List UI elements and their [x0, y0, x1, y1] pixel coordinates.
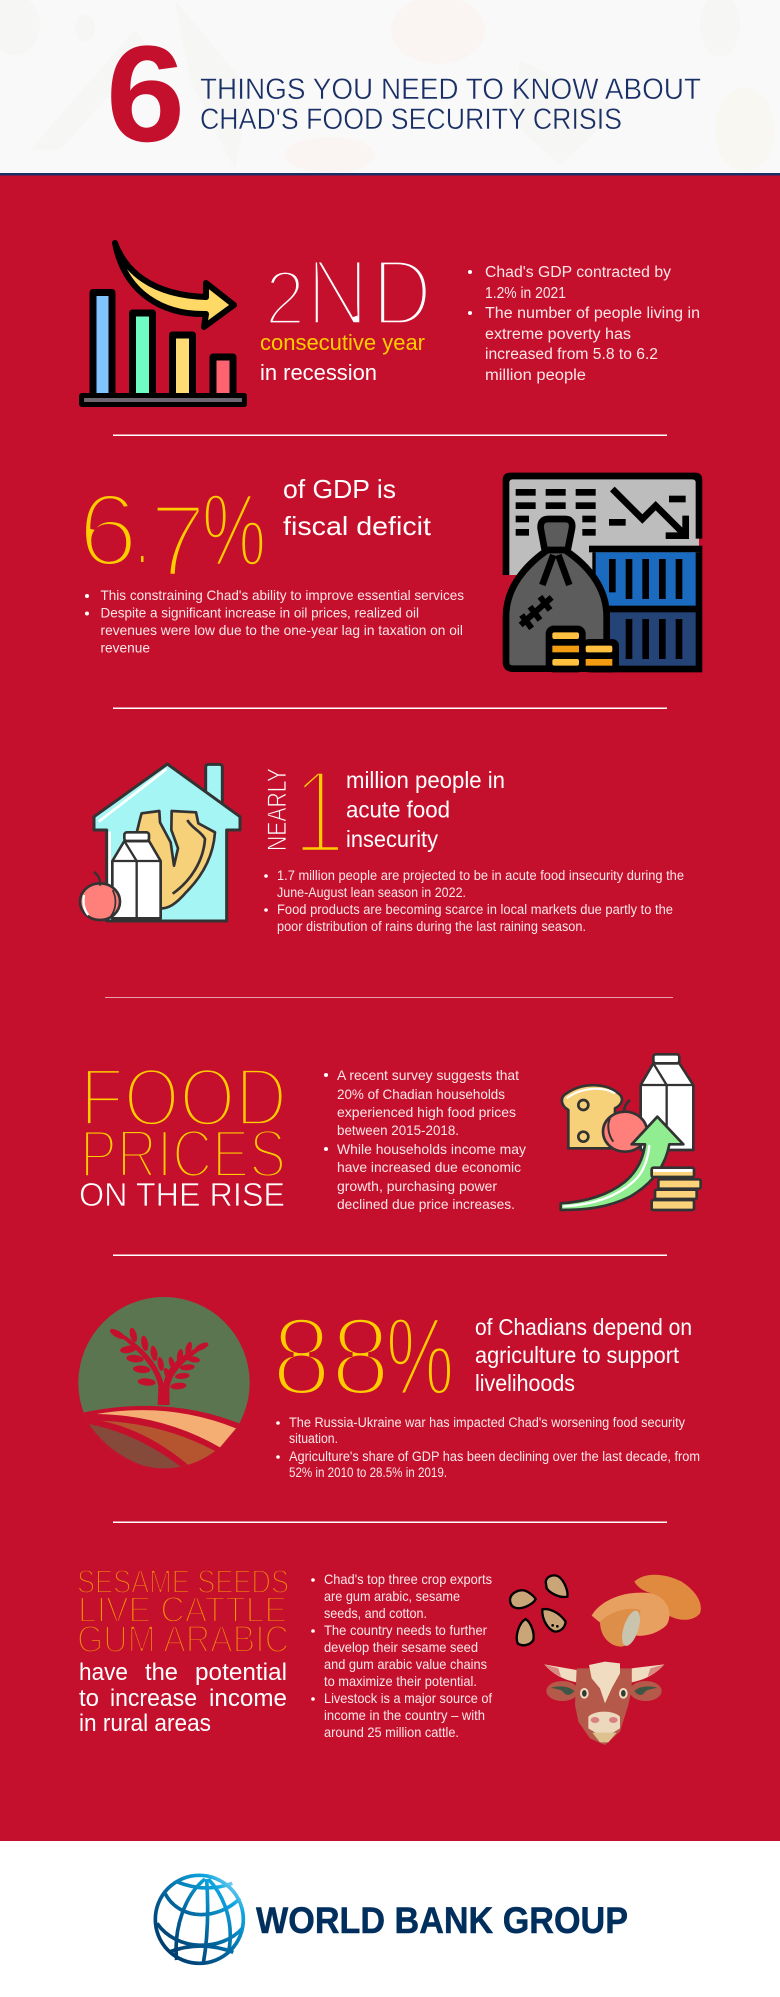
bullet list: A recent survey suggests that — [337, 1067, 519, 1083]
bullet list: income in the country – with — [324, 1707, 485, 1723]
bullet list: are gum arabic, sesame — [324, 1588, 460, 1604]
bullet list: growth, purchasing power — [337, 1178, 497, 1194]
label: NEARLY: NEARLY — [262, 768, 292, 851]
text: have the potential to increase income in rural areas: potential — [195, 1659, 287, 1686]
bullet list: experienced high food prices — [337, 1104, 516, 1120]
bullet list — [324, 1067, 526, 1212]
heading: sesame seeds, live cattle, gum arabic — [77, 1563, 289, 1661]
bullet list: Agriculture's share of GDP has been declining over the last decade, from — [289, 1449, 700, 1464]
stat: 2ND: D — [372, 240, 432, 346]
icon: seeds, almonds and cow — [510, 1575, 701, 1745]
bullet list: 20% of Chadian households — [337, 1086, 505, 1102]
heading: of Chadians depend on agriculture: livelihoods — [475, 1370, 575, 1396]
heading: of Chadians depend on agriculture: of Chadians depend on — [475, 1314, 692, 1340]
bullet list: June-August lean season in 2022. — [277, 885, 466, 900]
bullet list: between 2015-2018. — [337, 1122, 459, 1138]
heading: consecutive year in recession: consecutive year — [260, 330, 425, 355]
text: have the potential to increase income in rural areas: to — [79, 1685, 99, 1712]
seeds — [510, 1575, 568, 1645]
bullet list: develop their sesame seed — [324, 1639, 478, 1655]
bullet list: situation. — [289, 1431, 338, 1446]
bullet list: Chad's GDP contracted by — [485, 264, 671, 281]
stat: 6.7% — [78, 472, 266, 598]
text: have the potential to increase income in rural areas: have — [79, 1659, 128, 1686]
text: have the potential to increase income in rural areas: income — [209, 1685, 287, 1712]
text: have the potential to increase income in rural areas: the — [145, 1659, 178, 1686]
icon: farmland circle with wheat — [77, 1297, 250, 1477]
stat: 1: 1 — [293, 745, 345, 879]
heading: sesame seeds, live cattle, gum arabic: LIVE CATTLE — [78, 1589, 287, 1630]
heading: million people in acute food insecurity: insecurity — [346, 826, 438, 852]
section 6: exports and rural income — [77, 1563, 701, 1745]
heading: food prices on the rise: ON THE RISE — [79, 1176, 285, 1213]
heading: million people in acute food insecurity — [346, 767, 505, 852]
bullet list — [468, 264, 700, 384]
title: CHAD'S FOOD SECURITY CRISIS — [200, 103, 622, 136]
bullet list: around 25 million cattle. — [324, 1724, 459, 1740]
bullet list: extreme poverty has — [485, 326, 631, 343]
section 4: food prices — [79, 1051, 701, 1213]
heading: food prices on the rise: PRICES — [80, 1116, 286, 1192]
section 2: fiscal deficit — [78, 472, 702, 672]
bullet list: declined due price increases. — [337, 1196, 515, 1212]
heading: consecutive year in recession — [260, 330, 425, 385]
bullet list: The Russia-Ukraine war has impacted Chad's worsening food security — [289, 1415, 685, 1430]
heading: sesame seeds, live cattle, gum arabic: SESAME SEEDS — [77, 1563, 289, 1600]
text: have the potential to increase income in rural areas: increase — [110, 1685, 197, 1712]
bullet list: Livestock is a major source of — [324, 1690, 492, 1706]
bullet list: Despite a significant increase in oil prices, realized oil — [100, 604, 419, 620]
bullet list: increased from 5.8 to 6.2 — [485, 346, 658, 363]
section 5: agriculture — [77, 1296, 700, 1480]
heading: of GDP is fiscal deficit: fiscal deficit — [283, 511, 432, 541]
icon: globe — [155, 1875, 243, 1963]
bullet list: 1.7 million people are projected to be in acute food insecurity during the — [277, 868, 684, 883]
almonds — [592, 1575, 701, 1648]
icon: rising food prices — [561, 1054, 701, 1210]
bullet list: million people — [485, 367, 586, 384]
heading: consecutive year in recession: in recession — [260, 360, 377, 385]
bullet list: 1.2% in 2021 — [485, 285, 566, 302]
bullet list — [264, 868, 684, 934]
heading: of Chadians depend on agriculture: agriculture to support — [475, 1342, 680, 1368]
bullet list: and gum arabic value chains — [324, 1656, 487, 1672]
title — [200, 73, 701, 136]
stat: 2ND — [265, 240, 432, 346]
big number 6: 6 — [106, 18, 185, 171]
header band — [0, 0, 780, 176]
heading: of Chadians depend on agriculture — [475, 1314, 692, 1396]
heading: of GDP is fiscal deficit — [283, 474, 432, 541]
stat: 88%: % — [386, 1296, 454, 1418]
section 1: recession — [79, 240, 700, 407]
bullet list: seeds, and cotton. — [324, 1605, 427, 1621]
heading: million people in acute food insecurity: million people in — [346, 767, 505, 793]
heading: sesame seeds, live cattle, gum arabic: GUM ARABIC — [77, 1619, 289, 1661]
bullet list — [85, 587, 464, 656]
bullet list: revenues were low due to the one-year lag in taxation on oil — [100, 622, 463, 638]
stat: 88%: 88 — [272, 1296, 390, 1418]
stat: 6.7%: % — [202, 472, 266, 588]
cow — [544, 1662, 664, 1745]
stat: 6.7%: 6 — [78, 472, 138, 588]
wordmark: WORLD BANK GROUP — [256, 1899, 628, 1941]
bullet list: While households income may — [337, 1141, 526, 1157]
bullet list: 52% in 2010 to 28.5% in 2019. — [289, 1465, 447, 1480]
stat: 2ND: N — [306, 240, 369, 346]
heading: of GDP is fiscal deficit: of GDP is — [283, 474, 396, 504]
stat: 6.7%: 7 — [150, 484, 206, 598]
heading: food prices on the rise: FOOD — [80, 1051, 287, 1144]
icon: money bag, chart and containers — [503, 473, 702, 672]
bullet list: The country needs to further — [324, 1622, 487, 1638]
stat: 88% — [272, 1296, 454, 1418]
text: have the potential to increase income in rural areas — [79, 1659, 287, 1737]
heading: food prices on the rise — [79, 1051, 287, 1213]
title: THINGS YOU NEED TO KNOW ABOUT — [200, 73, 701, 106]
footer: World Bank Group logo — [0, 1841, 780, 1997]
bullet list: to maximize their potential. — [324, 1673, 477, 1689]
heading: million people in acute food insecurity: acute food — [346, 796, 450, 822]
bullet list: The number of people living in — [485, 305, 700, 322]
bullet list: have increased due economic — [337, 1159, 521, 1175]
stat: 2ND: 2 — [265, 256, 305, 342]
bullet list: This constraining Chad's ability to improve essential services — [100, 587, 464, 603]
bullet list — [276, 1415, 700, 1480]
bullet list: Chad's top three crop exports — [324, 1571, 492, 1587]
bullet list: revenue — [100, 640, 150, 656]
icon: falling bar chart — [79, 243, 247, 407]
bullet list: Food products are becoming scarce in local markets due partly to the — [277, 902, 673, 917]
section 3: acute food insecurity — [80, 745, 684, 934]
bullet list: poor distribution of rains during the last raining season. — [277, 919, 586, 934]
bullet list — [311, 1571, 492, 1740]
text: have the potential to increase income in rural areas: in rural areas — [79, 1710, 211, 1737]
icon: house with food — [80, 764, 240, 921]
